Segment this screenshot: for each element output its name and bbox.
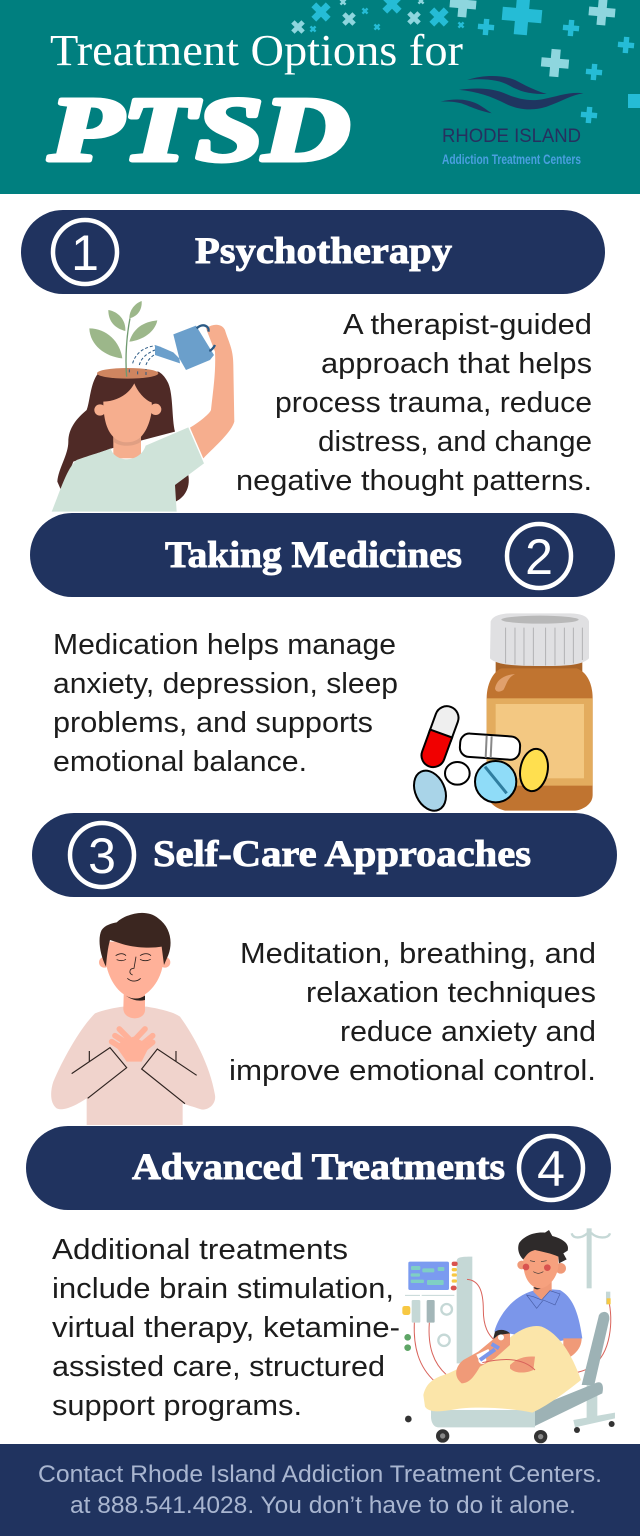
section 1 text: negative thought patterns. — [236, 465, 592, 497]
section 3 banner — [32, 813, 617, 897]
logo: Rhode Island Addiction Treatment Centers: RHODE ISLAND — [442, 126, 581, 147]
section 1 text: distress, and change — [318, 426, 592, 458]
section 4 text: support programs. — [52, 1390, 302, 1422]
section 4 text: virtual therapy, ketamine- — [52, 1312, 400, 1344]
section 1 text — [236, 309, 592, 497]
section 3 text — [229, 938, 596, 1087]
section 3 banner: Self-Care Approaches — [153, 834, 531, 875]
section 4 banner — [26, 1126, 611, 1210]
section 4 text: include brain stimulation, — [52, 1273, 394, 1305]
section 2 banner: Taking Medicines — [165, 535, 462, 576]
decorative medical crosses — [288, 0, 640, 124]
title: PTSD: PTSD — [48, 79, 350, 180]
section 2 banner: 2 — [525, 529, 553, 585]
section 3 text: Meditation, breathing, and — [240, 938, 596, 970]
section 1 text: approach that helps — [321, 348, 592, 380]
section 4 text: assisted care, structured — [52, 1351, 385, 1383]
footer panel: Contact Rhode Island Addiction Treatment Centers. — [38, 1461, 602, 1488]
section 2 text — [53, 629, 398, 778]
section 4 text: Additional treatments — [52, 1234, 348, 1266]
section 1 banner — [21, 210, 605, 294]
header panel — [0, 0, 640, 194]
section 1 banner: 1 — [71, 225, 99, 281]
illustration: woman watering plant in her head — [52, 301, 234, 512]
title line: Treatment Options for — [50, 26, 463, 75]
section 4 text — [52, 1234, 400, 1422]
illustration: patient receiving treatment in a chair — [402, 1228, 615, 1443]
section 1 text: process trauma, reduce — [275, 387, 592, 419]
section 2 text: anxiety, depression, sleep — [53, 668, 398, 700]
section 3 text: relaxation techniques — [306, 977, 596, 1009]
section 3 banner: 3 — [88, 828, 116, 884]
section 1 banner: Psychotherapy — [195, 231, 453, 272]
section 2 text: Medication helps manage — [53, 629, 396, 661]
section 3 text: reduce anxiety and — [340, 1016, 596, 1048]
section 1 text: A therapist-guided — [343, 309, 592, 341]
section 2 banner — [30, 513, 615, 597]
section 3 text: improve emotional control. — [229, 1055, 596, 1087]
logo: Rhode Island Addiction Treatment Centers — [441, 76, 583, 167]
section 2 text: emotional balance. — [53, 746, 307, 778]
illustration: man meditating with hands on chest — [51, 913, 215, 1125]
logo: Rhode Island Addiction Treatment Centers: Addiction Treatment Centers — [442, 152, 581, 167]
section 4 banner: 4 — [537, 1141, 565, 1197]
section 2 text: problems, and supports — [53, 707, 373, 739]
footer panel: at 888.541.4028. You don’t have to do it alone. — [70, 1492, 576, 1519]
section 4 banner: Advanced Treatments — [132, 1147, 505, 1188]
illustration: medicine bottle and pills — [408, 613, 593, 816]
footer panel — [0, 1444, 640, 1536]
